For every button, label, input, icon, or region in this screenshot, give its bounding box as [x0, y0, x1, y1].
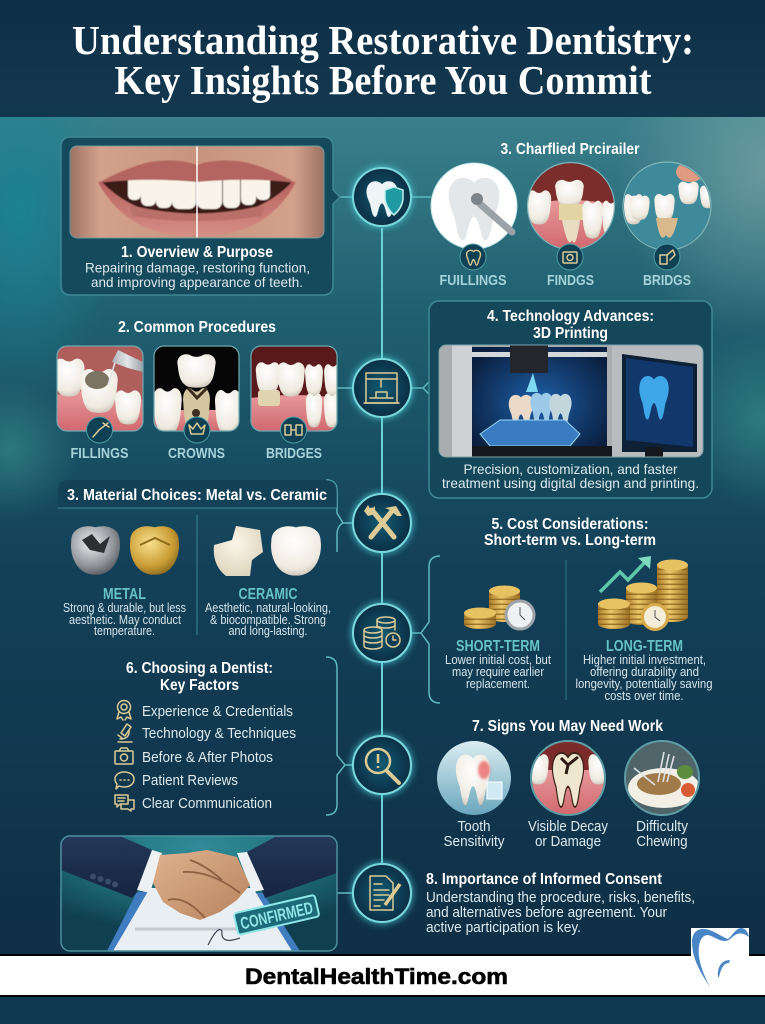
label: ceramic: CERAMIC — [238, 586, 298, 603]
icon: crown badge — [184, 417, 210, 443]
metal description — [63, 601, 186, 638]
label: long-term: LONG-TERM — [606, 638, 683, 655]
icon: bridge badge — [654, 244, 680, 270]
header band with title: Key Insights Before You Commit — [114, 57, 652, 103]
timeline node: tooth with shield — [351, 166, 413, 228]
icon: communication bubbles — [115, 795, 134, 811]
text: patient reviews: Patient Reviews — [142, 772, 238, 789]
connectors and brackets — [326, 197, 440, 893]
photo: fillings — [54, 346, 143, 431]
footer band with website — [0, 954, 765, 1024]
heading — [484, 516, 656, 549]
description: Precision, customization, and faster — [464, 461, 678, 477]
label: crowns: CROWNS — [168, 445, 225, 462]
icon: short-term coins and clock — [464, 586, 534, 629]
short-term description — [445, 653, 551, 691]
description — [442, 461, 699, 491]
label: difficulty chewing — [636, 818, 688, 850]
photo: difficulty chewing — [625, 741, 700, 815]
label: difficulty chewing: Chewing — [636, 833, 688, 850]
label: fillings: FILLINGS — [70, 445, 128, 462]
heading — [126, 660, 273, 694]
label: tooth sensitivity: Tooth — [458, 818, 490, 835]
timeline node: tools — [351, 492, 413, 554]
section: 2 common procedures — [54, 319, 342, 462]
heading: 7. Signs You May Need Work — [472, 718, 663, 735]
section: charflied prcirailer circles — [431, 141, 716, 289]
text block: 8 informed consent — [426, 871, 695, 936]
heading: 4. Technology Advances: — [487, 308, 654, 325]
photo: tooth with drill — [431, 163, 517, 249]
description — [426, 889, 695, 936]
smile photo — [70, 146, 324, 238]
heading bar — [58, 480, 337, 508]
text: before and after photos: Before & After Photos — [142, 749, 273, 766]
icon: camera badge — [557, 244, 583, 270]
label: difficulty chewing: Difficulty — [636, 818, 688, 835]
heading: Key Factors — [160, 677, 239, 694]
section: 6 choosing a dentist — [115, 660, 296, 812]
label: bridgs: BRIDGS — [643, 272, 691, 289]
long-term description — [576, 653, 713, 703]
icon: filling tool badge — [86, 417, 112, 443]
ceramic description — [205, 601, 331, 638]
section: 3 material choices — [58, 480, 337, 638]
heading: 8. Importance of Informed Consent — [426, 871, 663, 888]
description: Understanding the procedure, risks, benefits, — [426, 889, 695, 906]
icon: tooth badge — [460, 244, 486, 270]
ceramic description: Aesthetic, natural-looking, — [205, 601, 331, 615]
timeline node: magnifier — [351, 734, 413, 796]
panel: 4 technology advances — [429, 301, 712, 498]
description: Repairing damage, restoring function, — [85, 260, 310, 276]
photo: bridges — [251, 346, 342, 431]
label: visible decay: or Damage — [535, 833, 601, 850]
long-term description: offering durability and — [590, 665, 699, 679]
heading: 1. Overview & Purpose — [121, 244, 273, 261]
long-term description: Higher initial investment, — [583, 653, 706, 667]
icon: camera — [115, 748, 133, 764]
description: active participation is key. — [426, 919, 581, 936]
timeline node: signed document — [351, 862, 413, 924]
metal description: temperature. — [94, 624, 155, 638]
panel: 1 overview and purpose — [61, 137, 340, 295]
photo: 3d printer and monitor — [439, 345, 703, 457]
icon: review speech bubble — [115, 772, 134, 789]
icon: long-term coins, clock and arrow — [598, 556, 688, 630]
heading: 5. Cost Considerations: — [492, 516, 648, 533]
ceramic description: & biocompatible. Strong — [210, 613, 326, 627]
description — [85, 260, 310, 290]
icon: ribbon award — [117, 700, 131, 720]
metal description: Strong & durable, but less — [63, 601, 186, 615]
timeline node: coins and clock — [351, 602, 413, 664]
description: and alternatives before agreement. Your — [426, 904, 667, 921]
label: short-term: SHORT-TERM — [456, 638, 540, 655]
confirmed stamp: CONFIRMED — [239, 898, 315, 933]
label: visible decay — [528, 818, 608, 850]
long-term description: costs over time. — [604, 689, 684, 703]
panel: handshake photo — [61, 836, 337, 951]
short-term description: replacement. — [466, 677, 530, 691]
text: clear communication: Clear Communication — [142, 795, 272, 812]
short-term description: may require earlier — [452, 665, 544, 679]
photo: metal crowns — [71, 526, 179, 575]
text: technology and techniques: Technology & Techniques — [142, 725, 296, 742]
logo: blue tooth — [691, 928, 749, 987]
confirmed stamp — [234, 895, 319, 935]
ceramic description: and long-lasting. — [228, 624, 308, 638]
photo: crown on implant — [527, 162, 620, 250]
icon: bridge badge — [280, 417, 306, 443]
short-term description: Lower initial cost, but — [445, 653, 551, 667]
long-term description: longevity, potentially saving — [576, 677, 713, 691]
icon: microscope — [118, 724, 132, 742]
label: fuillings: FUILLINGS — [440, 272, 506, 289]
description: treatment using digital design and printing. — [442, 475, 699, 491]
photo: bridge — [623, 162, 716, 250]
central timeline line — [380, 228, 384, 864]
heading: 6. Choosing a Dentist: — [126, 660, 273, 677]
label: metal: METAL — [103, 586, 146, 603]
section: 7 signs you may need work — [437, 718, 700, 850]
header band with title — [0, 0, 765, 117]
footer band with website: DentalHealthTime.com — [245, 964, 508, 989]
heading bar: 3. Material Choices: Metal vs. Ceramic — [67, 487, 327, 504]
heading — [487, 308, 654, 342]
timeline node: 3d printer — [351, 357, 413, 419]
photo: crowns — [153, 346, 241, 434]
label: tooth sensitivity — [444, 818, 505, 850]
label: tooth sensitivity: Sensitivity — [444, 833, 505, 850]
photo: ceramic crowns — [214, 526, 321, 576]
header band with title: Understanding Restorative Dentistry: — [72, 17, 694, 63]
heading: 2. Common Procedures — [118, 319, 276, 336]
heading: 3D Printing — [533, 325, 608, 342]
text: experience and credentials: Experience & Credentials — [142, 703, 293, 720]
label: bridges: BRIDGES — [266, 445, 322, 462]
label: visible decay: Visible Decay — [528, 818, 608, 835]
description: and improving appearance of teeth. — [91, 274, 303, 290]
section: 5 cost considerations — [445, 516, 713, 703]
metal description: aesthetic. May conduct — [69, 613, 181, 627]
label: findgs: FINDGS — [547, 272, 594, 289]
photo: tooth sensitivity — [437, 741, 511, 815]
photo: visible decay — [528, 741, 609, 815]
heading: Short-term vs. Long-term — [484, 532, 656, 549]
heading: 3. Charflied Prcirailer — [500, 141, 640, 158]
